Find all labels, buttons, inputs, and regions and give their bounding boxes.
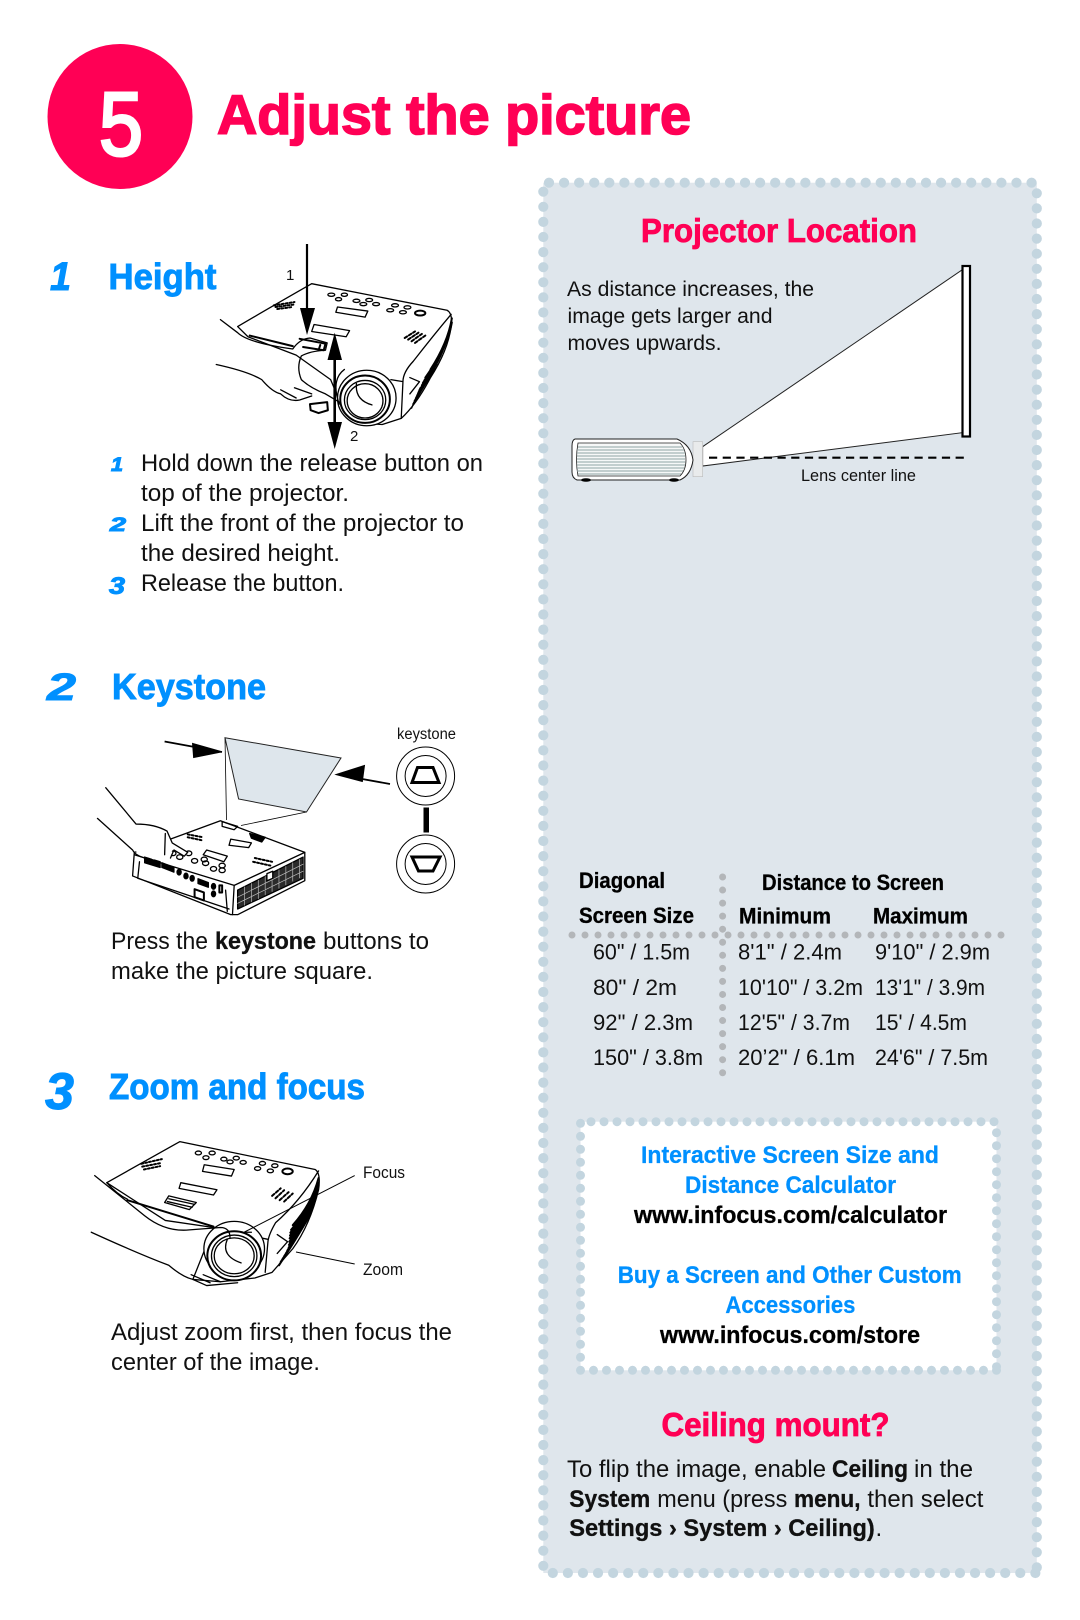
calculator link: Interactive Screen Size and xyxy=(641,1142,939,1169)
zoom and focus instructions xyxy=(111,1319,452,1376)
illustration: lifting the projector xyxy=(216,284,452,426)
ceiling mount instructions: menu, xyxy=(794,1486,860,1513)
illustration label 2: 2 xyxy=(350,428,358,445)
zoom and focus instructions: center of the image. xyxy=(111,1349,320,1376)
header xyxy=(48,44,691,189)
table headers: Maximum xyxy=(873,904,968,928)
table rows: 80" / 2m xyxy=(593,975,677,1000)
focus leader xyxy=(244,1176,355,1232)
arrow: press down xyxy=(300,244,315,335)
table: screen size and distance xyxy=(572,868,1003,1074)
table rows: 24'6" / 7.5m xyxy=(875,1045,988,1070)
arrow: left side xyxy=(165,742,222,757)
keystone instructions: buttons to xyxy=(323,928,429,955)
table headers: Diagonal xyxy=(579,868,665,893)
heading: zoom and focus: Zoom and focus xyxy=(109,1066,365,1107)
zoom and focus instructions: Adjust zoom first, then focus the xyxy=(111,1319,452,1346)
instruction list: 2 xyxy=(108,515,127,536)
connector between buttons xyxy=(424,808,429,832)
ceiling mount instructions: Ceiling xyxy=(832,1456,908,1483)
diagram: projection distance xyxy=(572,266,970,485)
lens center line xyxy=(709,457,965,459)
heading: zoom and focus xyxy=(45,1063,365,1121)
calculator link xyxy=(633,1142,947,1229)
ceiling mount instructions xyxy=(567,1456,984,1542)
heading: height xyxy=(50,255,217,299)
store link: Accessories xyxy=(725,1292,855,1319)
table headers xyxy=(579,868,968,928)
lens center label: Lens center line xyxy=(801,467,916,485)
ceiling mount instructions: . xyxy=(876,1515,882,1542)
icon: keystone down button xyxy=(397,835,455,893)
distance explanation: As distance increases, the xyxy=(567,277,814,301)
focus label: Focus xyxy=(363,1164,405,1182)
panel: projector location sidebar xyxy=(543,183,1040,1575)
ceiling mount instructions: menu (press xyxy=(657,1486,787,1513)
icon: keystone up button xyxy=(397,747,455,805)
illustration: keystoned image xyxy=(225,738,341,826)
panel: height xyxy=(50,244,483,600)
instruction list: Lift the front of the projector to xyxy=(141,510,464,537)
table rows: 13'1" / 3.9m xyxy=(875,975,985,1000)
table rows: 150" / 3.8m xyxy=(593,1045,703,1070)
zoom label: Zoom xyxy=(363,1261,403,1279)
instruction list: 3 xyxy=(109,573,126,600)
illustration: adjusting the lens xyxy=(91,1142,319,1286)
illustration: projector with hand xyxy=(97,788,305,915)
distance explanation: image gets larger and xyxy=(568,304,772,328)
table headers: Distance to Screen xyxy=(762,870,944,895)
instruction list: 1 xyxy=(111,455,123,476)
table headers: Screen Size xyxy=(579,903,694,928)
heading: keystone xyxy=(46,666,266,709)
callout: calculator and store links xyxy=(580,1122,998,1372)
table rows: 92" / 2.3m xyxy=(593,1010,693,1035)
ceiling mount instructions: then select xyxy=(867,1486,984,1513)
heading: projector location: Projector Location xyxy=(641,212,917,249)
store link xyxy=(618,1262,962,1349)
distance explanation: moves upwards. xyxy=(568,331,722,355)
table rows: 12'5" / 3.7m xyxy=(738,1010,850,1035)
title: Adjust the picture xyxy=(217,83,691,146)
table rows: 9'10" / 2.9m xyxy=(875,940,990,964)
table headers: Minimum xyxy=(739,904,831,928)
heading: height: 1 xyxy=(50,255,71,299)
instruction list: Hold down the release button on xyxy=(141,450,483,477)
ceiling mount instructions: in the xyxy=(914,1456,973,1483)
instruction list xyxy=(108,450,483,600)
instruction list: Release the button. xyxy=(141,570,344,597)
zoom leader xyxy=(296,1252,355,1264)
sidebar background xyxy=(543,183,1040,1575)
table rows: 60" / 1.5m xyxy=(593,940,690,964)
table rules xyxy=(572,877,1003,1074)
calculator link: www.infocus.com/calculator xyxy=(633,1202,947,1229)
distance explanation xyxy=(567,277,814,355)
heading: keystone: 2 xyxy=(46,667,76,709)
table rows xyxy=(593,940,990,1070)
step number badge xyxy=(48,44,192,189)
heading: ceiling mount: Ceiling mount? xyxy=(662,1406,890,1443)
projector side view xyxy=(572,439,703,482)
table rows: 10'10" / 3.2m xyxy=(738,975,863,1000)
panel: keystone xyxy=(46,666,456,985)
panel: zoom and focus xyxy=(45,1063,452,1376)
callout background xyxy=(580,1122,998,1372)
instruction list: the desired height. xyxy=(141,540,340,567)
keystone instructions: make the picture square. xyxy=(111,958,373,985)
table rows: 8'1" / 2.4m xyxy=(738,940,842,964)
keystone instructions xyxy=(111,928,429,985)
table rows: 20’2" / 6.1m xyxy=(738,1045,855,1070)
keystone instructions: keystone xyxy=(215,928,316,955)
table rows: 15' / 4.5m xyxy=(875,1010,967,1035)
calculator link: Distance Calculator xyxy=(685,1172,896,1199)
illustration label 1: 1 xyxy=(286,267,294,284)
heading: keystone: Keystone xyxy=(112,666,266,707)
heading: height: Height xyxy=(108,256,217,297)
step number badge: 5 xyxy=(99,75,143,175)
arrow: lift up and down xyxy=(328,333,342,449)
keystone label: keystone xyxy=(397,726,456,743)
instruction list: top of the projector. xyxy=(141,480,349,507)
ceiling mount instructions: Settings › System › Ceiling) xyxy=(569,1515,875,1542)
screen xyxy=(962,266,970,436)
ceiling mount instructions: To flip the image, enable xyxy=(567,1456,826,1483)
arrow: right side xyxy=(338,766,390,784)
store link: Buy a Screen and Other Custom xyxy=(618,1262,962,1289)
ceiling mount instructions: System xyxy=(569,1486,650,1513)
store link: www.infocus.com/store xyxy=(659,1322,920,1349)
projection beam xyxy=(703,270,962,466)
heading: zoom and focus: 3 xyxy=(45,1063,74,1121)
keystone instructions: Press the xyxy=(111,928,208,955)
